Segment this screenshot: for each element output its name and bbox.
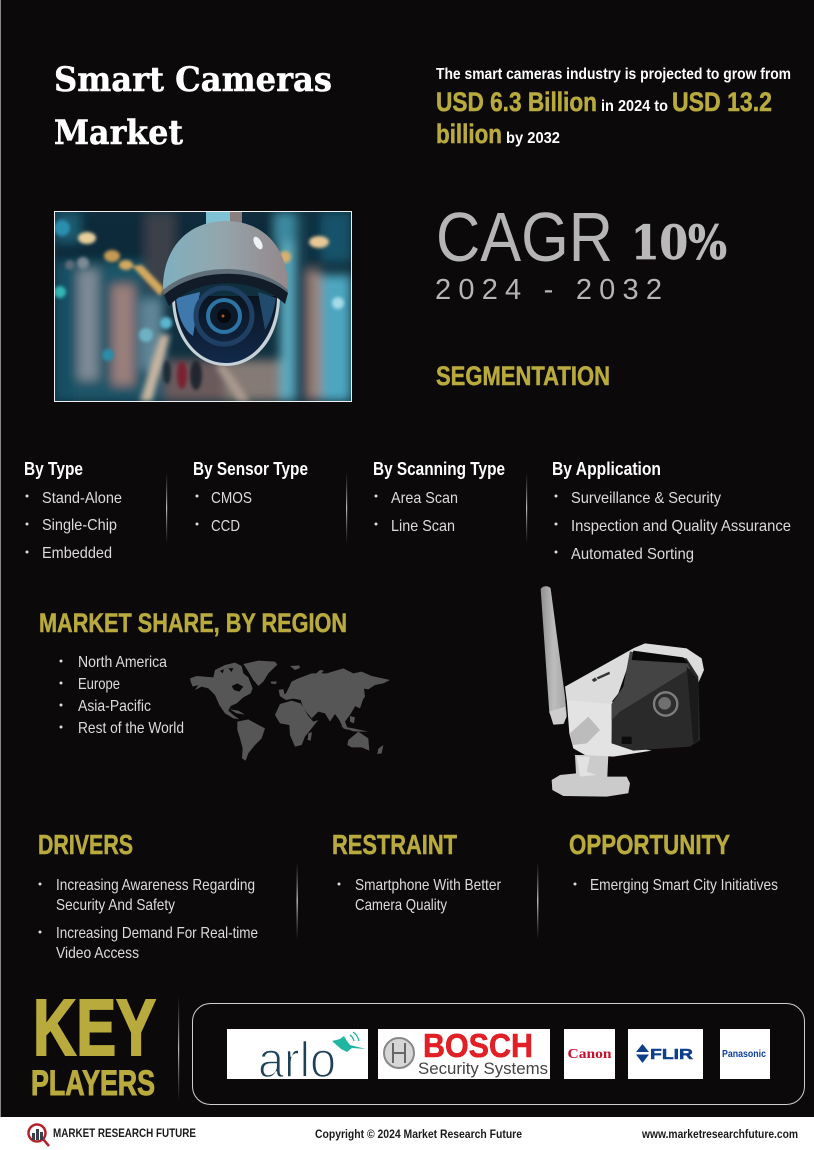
segment: by application: Surveillance & Security xyxy=(571,490,721,507)
heading: segmentation: SEGMENTATION xyxy=(436,361,610,391)
segment: by sensor type: CCD xyxy=(211,518,240,535)
title: Market xyxy=(54,113,183,153)
segment: by type: Stand-Alone xyxy=(42,490,122,507)
market growth summary: USD 13.2 xyxy=(672,87,772,117)
logo: bosch security systems xyxy=(378,1027,550,1079)
segment: by application xyxy=(552,459,791,563)
market growth summary: USD 6.3 Billion xyxy=(436,87,597,117)
heading: market share by region: MARKET SHARE, BY REGION xyxy=(39,608,347,638)
panel: key player logos xyxy=(192,1004,804,1104)
panel: drivers: Security And Safety xyxy=(56,897,175,914)
footer xyxy=(0,1117,814,1150)
logo: bosch security systems: Security Systems xyxy=(418,1059,548,1078)
CAGR headline: 10% xyxy=(631,216,727,271)
segment: by application: Inspection and Quality Assurance xyxy=(571,518,791,535)
segment: by scanning type xyxy=(373,459,505,535)
heading: key players: KEY xyxy=(33,983,156,1072)
CAGR headline: 2024 - 2032 xyxy=(435,274,662,306)
market growth summary xyxy=(436,66,791,149)
segment: by type: Embedded xyxy=(42,545,112,562)
logo: panasonic: Panasonic xyxy=(722,1049,766,1060)
region list: North America xyxy=(78,654,167,671)
lens sphere xyxy=(172,296,280,366)
panel: drivers: DRIVERS xyxy=(38,829,133,860)
panel: restraint: Camera Quality xyxy=(355,897,447,914)
logo: canon: Canon xyxy=(568,1047,612,1062)
segment: by application: Automated Sorting xyxy=(571,546,694,563)
logo: arlo: arlo xyxy=(258,1032,336,1088)
logo: panasonic xyxy=(720,1029,770,1079)
segment: by type: Single-Chip xyxy=(42,517,117,534)
region list: Europe xyxy=(78,676,120,693)
panel: restraint: RESTRAINT xyxy=(332,829,457,860)
region list: Rest of the World xyxy=(78,720,184,737)
segment: by scanning type: By Scanning Type xyxy=(373,459,505,479)
logo: arlo xyxy=(227,1029,368,1088)
panel: drivers: Increasing Awareness Regarding xyxy=(56,877,255,894)
market growth summary: billion xyxy=(436,119,502,149)
panel: opportunity: OPPORTUNITY xyxy=(569,829,730,860)
panel: drivers xyxy=(38,829,258,962)
region list: Asia-Pacific xyxy=(78,698,151,715)
logo: flir: FLIR xyxy=(650,1046,693,1063)
heading: key players: PLAYERS xyxy=(31,1064,155,1103)
CAGR headline: CAGR xyxy=(436,198,613,276)
segment: by sensor type: By Sensor Type xyxy=(193,459,308,479)
logo: canon xyxy=(564,1029,615,1079)
logo: flir xyxy=(628,1029,703,1079)
panel: opportunity xyxy=(569,829,778,894)
logo: bosch security systems: BOSCH xyxy=(423,1027,533,1064)
hero photo: dome camera xyxy=(54,212,352,402)
panel: drivers: Increasing Demand For Real-time xyxy=(56,925,258,942)
segment: by scanning type: Line Scan xyxy=(391,518,455,535)
segment: by type: By Type xyxy=(24,459,83,479)
panel: opportunity: Emerging Smart City Initiatives xyxy=(590,877,778,894)
segment: by type xyxy=(24,459,122,562)
dome housing xyxy=(163,221,288,298)
market growth summary: in 2024 to xyxy=(601,98,668,115)
segment: by scanning type: Area Scan xyxy=(391,490,458,507)
title: Smart Cameras xyxy=(54,60,332,100)
world map xyxy=(190,661,390,761)
panel: drivers: Video Access xyxy=(56,945,139,962)
title xyxy=(54,60,332,153)
panel: restraint xyxy=(332,829,502,914)
market growth summary: by 2032 xyxy=(506,130,560,147)
region list xyxy=(60,654,184,737)
panel: restraint: Smartphone With Better xyxy=(355,877,502,894)
icon: bullet camera with antenna xyxy=(541,586,704,797)
segment: by sensor type: CMOS xyxy=(211,490,252,507)
copyright: Copyright © 2024 Market Research Future xyxy=(315,1127,522,1141)
heading: key players xyxy=(31,983,156,1103)
segment: by sensor type xyxy=(193,459,308,535)
segment: by application: By Application xyxy=(552,459,661,479)
CAGR headline xyxy=(435,198,727,306)
logo: market research future xyxy=(28,1124,196,1146)
logo: market research future: MARKET RESEARCH FUTURE xyxy=(53,1126,196,1140)
